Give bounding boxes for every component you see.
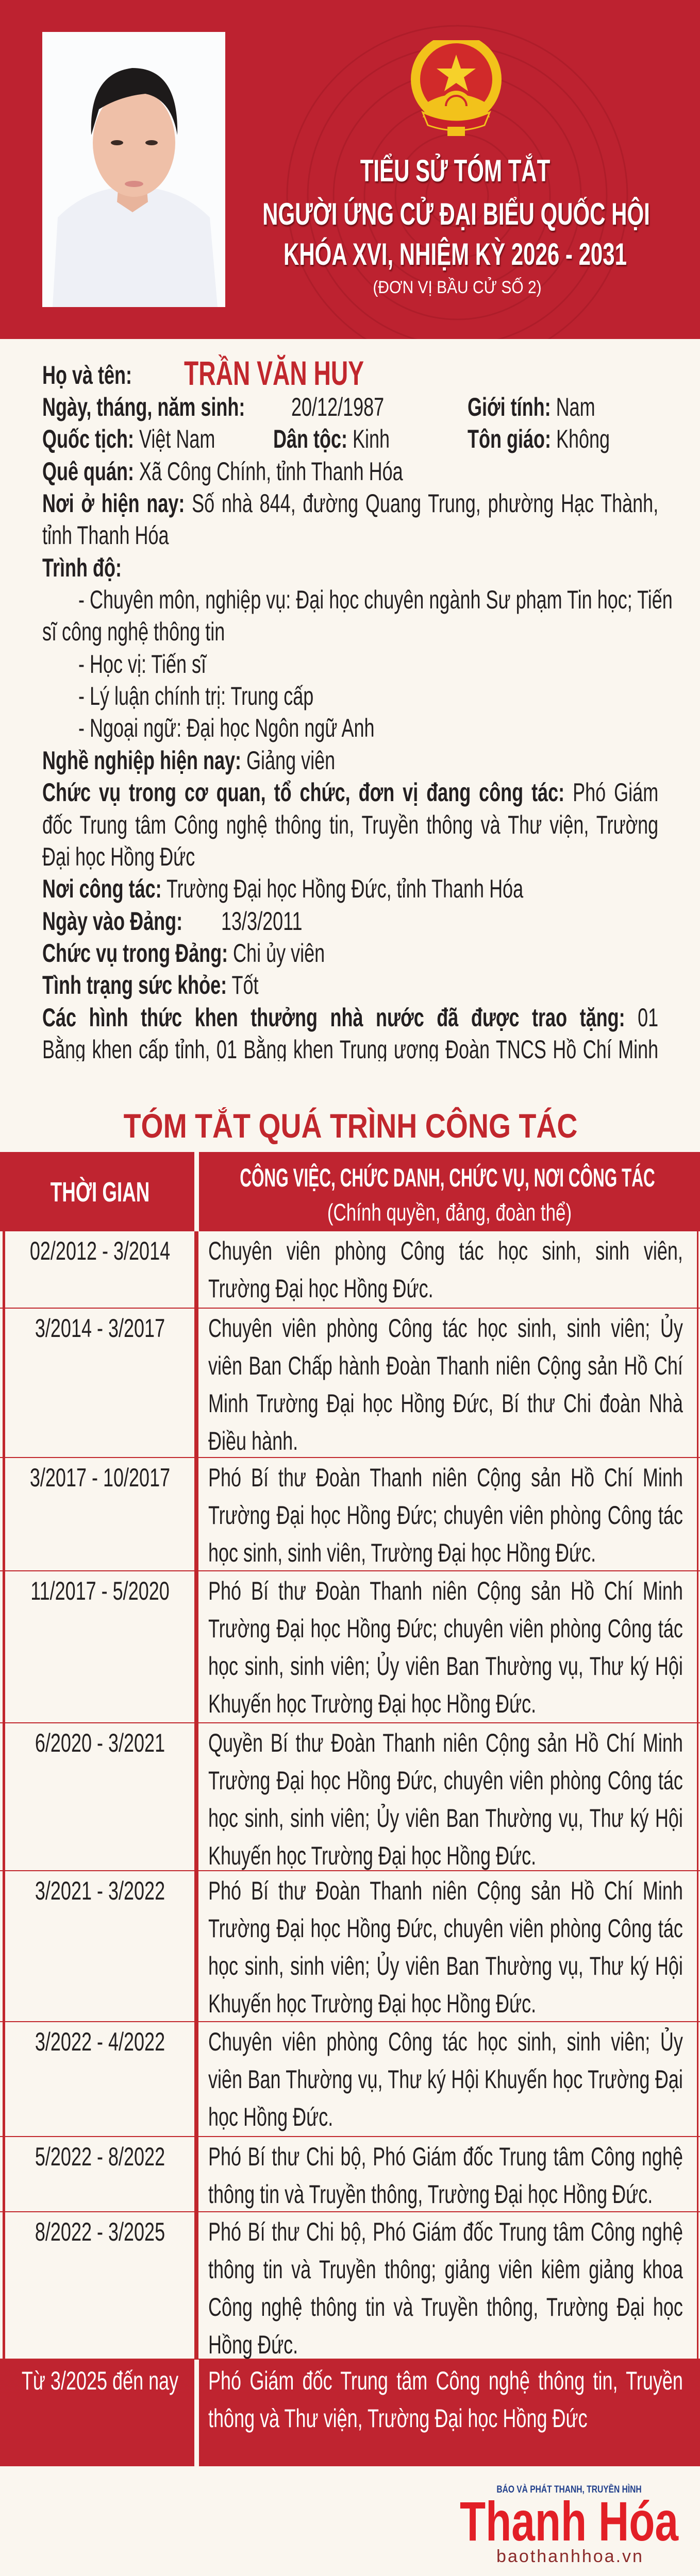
title: (ĐƠN VỊ BẦU CỬ SỐ 2) <box>373 278 542 297</box>
row 9: 8/2022 - 3/2025 <box>35 2217 165 2246</box>
row 6: học sinh, sinh viên; Ủy viên Ban Thường vụ, Thư ký Hội <box>208 1952 683 1980</box>
row 7 <box>0 2022 700 2137</box>
row 2: 3/2014 - 3/2017 <box>35 1314 165 1343</box>
table header: THỜI GIAN <box>51 1177 149 1208</box>
panel: personal information: đốc Trung tâm Công nghệ thông tin, Truyền thông và Thư viện, Trường <box>42 810 658 839</box>
logo: Thanh Hóa newspaper: Thanh Hóa <box>460 2490 678 2552</box>
row 3: học sinh, sinh viên, Trường Đại học Hồng Đức. <box>208 1538 596 1567</box>
table borders <box>3 1231 5 2360</box>
row 2: viên Ban Chấp hành Đoàn Thanh niên Cộng sản Hồ Chí <box>208 1351 683 1380</box>
row 2: Điều hành. <box>208 1427 298 1455</box>
row 5: học sinh, sinh viên; Ủy viên Ban Thường vụ, Thư ký Hội <box>208 1804 683 1833</box>
row 1 <box>0 1231 700 1309</box>
row 1: Trường Đại học Hồng Đức. <box>208 1274 434 1303</box>
row 3: 3/2017 - 10/2017 <box>30 1463 170 1492</box>
row 7: học Hồng Đức. <box>208 2103 333 2131</box>
candidate name: TRẦN VĂN HUY <box>184 354 364 392</box>
row 5 <box>0 1723 700 1871</box>
row 7: Chuyên viên phòng Công tác học sinh, sinh viên; Ủy <box>208 2027 683 2056</box>
logo: Thanh Hóa newspaper: BÁO VÀ PHÁT THANH, TRUYỀN HÌNH <box>496 2484 642 2495</box>
panel: personal information: sĩ công nghệ thông tin <box>42 617 225 646</box>
row 2: Minh Trường Đại học Hồng Đức, Bí thư Chi đoàn Nhà <box>208 1389 683 1418</box>
panel: personal information: Tình trạng sức khỏe: Tốt <box>42 971 258 999</box>
row 4: học sinh, sinh viên; Ủy viên Ban Thường vụ, Thư ký Hội <box>208 1652 683 1681</box>
panel: personal information: Quốc tịch: Việt Nam <box>42 425 215 453</box>
heading: work history: TÓM TẮT QUÁ TRÌNH CÔNG TÁC <box>124 1107 577 1145</box>
row 8 <box>0 2137 700 2212</box>
panel: personal information: Dân tộc: Kinh <box>273 425 390 453</box>
panel: personal information: Các hình thức khen thưởng nhà nước đã được trao tặng: 01 <box>42 1003 658 1032</box>
row 6: 3/2021 - 3/2022 <box>35 1876 165 1905</box>
panel: personal information <box>42 354 673 1061</box>
row 6: Trường Đại học Hồng Đức, chuyên viên phòng Công tác <box>208 1914 683 1943</box>
row 2 <box>0 1309 700 1458</box>
icon: national emblem <box>411 40 502 136</box>
panel: personal information: Tôn giáo: Không <box>468 425 610 453</box>
panel: personal information: Họ và tên: <box>42 361 132 389</box>
table header <box>0 1152 700 1231</box>
row 8: Phó Bí thư Chi bộ, Phó Giám đốc Trung tâm Công nghệ <box>208 2142 683 2171</box>
panel: personal information: Đại học Hồng Đức <box>42 842 195 871</box>
row 2: Chuyên viên phòng Công tác học sinh, sinh viên; Ủy <box>208 1314 683 1343</box>
title: NGƯỜI ỨNG CỬ ĐẠI BIỂU QUỐC HỘI <box>262 197 650 231</box>
logo: Thanh Hóa newspaper: baothanhhoa.vn <box>496 2547 644 2566</box>
decorative drum pattern <box>287 25 628 339</box>
row 5: 6/2020 - 3/2021 <box>35 1728 165 1757</box>
panel: personal information: - Lý luận chính trị: Trung cấp <box>78 682 313 710</box>
panel: personal information: Nơi ở hiện nay: Số nhà 844, đường Quang Trung, phường Hạc Thành, <box>42 489 658 518</box>
row 4: Phó Bí thư Đoàn Thanh niên Cộng sản Hồ Chí Minh <box>208 1577 683 1605</box>
row 1: 02/2012 - 3/2014 <box>30 1236 170 1265</box>
row 3: Trường Đại học Hồng Đức; chuyên viên phòng Công tác <box>208 1501 683 1530</box>
row 5: Quyền Bí thư Đoàn Thanh niên Cộng sản Hồ Chí Minh <box>208 1728 683 1757</box>
candidate photo <box>42 32 225 307</box>
row 9 <box>0 2212 700 2360</box>
panel: personal information: Nghề nghiệp hiện nay: Giảng viên <box>42 746 335 775</box>
title: TIỂU SỬ TÓM TẮT <box>360 154 550 188</box>
row 9: Phó Bí thư Chi bộ, Phó Giám đốc Trung tâm Công nghệ <box>208 2217 683 2246</box>
row 9: Hồng Đức. <box>208 2330 298 2359</box>
row 10: current (highlighted): thông và Thư viện, Trường Đại học Hồng Đức <box>208 2404 588 2433</box>
row 9: Công nghệ thông tin và Truyền thông, Trường Đại học <box>208 2293 683 2321</box>
row 4: Khuyến học Trường Đại học Hồng Đức. <box>208 1689 536 1718</box>
panel: personal information: 13/3/2011 <box>221 907 302 936</box>
row 7: 3/2022 - 4/2022 <box>35 2027 165 2056</box>
row 1: Chuyên viên phòng Công tác học sinh, sinh viên, <box>208 1236 683 1265</box>
panel: personal information: 20/12/1987 <box>291 393 384 421</box>
row 8: 5/2022 - 8/2022 <box>35 2142 165 2171</box>
row 8: thông tin và Truyền thông, Trường Đại học Hồng Đức. <box>208 2180 653 2209</box>
panel: personal information: Giới tính: Nam <box>468 393 595 421</box>
panel: personal information: Quê quán: Xã Công Chính, tỉnh Thanh Hóa <box>42 457 403 486</box>
row 7: viên Ban Thường vụ, Thư ký Hội Khuyến học Trường Đại <box>208 2065 683 2094</box>
panel: personal information: - Ngoại ngữ: Đại học Ngôn ngữ Anh <box>78 714 375 742</box>
panel: personal information: Ngày, tháng, năm sinh: <box>42 393 245 421</box>
panel: personal information: - Chuyên môn, nghiệp vụ: Đại học chuyên ngành Sư phạm Tin học; Tiến <box>78 585 673 614</box>
row 6: Khuyến học Trường Đại học Hồng Đức. <box>208 1989 536 2018</box>
panel: personal information: - Học vị: Tiến sĩ <box>78 650 206 679</box>
table header: CÔNG VIỆC, CHỨC DANH, CHỨC VỤ, NƠI CÔNG TÁC <box>240 1163 655 1192</box>
panel: personal information: Ngày vào Đảng: <box>42 907 182 936</box>
panel: personal information: Nơi công tác: Trường Đại học Hồng Đức, tỉnh Thanh Hóa <box>42 874 523 903</box>
table: work history <box>0 1152 700 2466</box>
row 4: 11/2017 - 5/2020 <box>30 1577 170 1605</box>
title <box>262 154 650 297</box>
row 3: Phó Bí thư Đoàn Thanh niên Cộng sản Hồ Chí Minh <box>208 1463 683 1492</box>
header banner <box>0 0 700 339</box>
row 10: current (highlighted) <box>0 2360 700 2466</box>
row 6: Phó Bí thư Đoàn Thanh niên Cộng sản Hồ Chí Minh <box>208 1876 683 1905</box>
row 10: current (highlighted): Từ 3/2025 đến nay <box>22 2366 178 2395</box>
row 10: current (highlighted): Phó Giám đốc Trung tâm Công nghệ thông tin, Truyền <box>208 2366 683 2395</box>
panel: personal information: Chức vụ trong cơ quan, tổ chức, đơn vị đang công tác: Phó Giám <box>42 778 658 807</box>
row 6 <box>0 1871 700 2022</box>
panel: personal information: Chức vụ trong Đảng: Chi ủy viên <box>42 939 325 968</box>
title: KHÓA XVI, NHIỆM KỲ 2026 - 2031 <box>284 237 627 272</box>
row 3 <box>0 1458 700 1571</box>
panel: personal information: Trình độ: <box>42 553 122 582</box>
row 5: Trường Đại học Hồng Đức, chuyên viên phòng Công tác <box>208 1766 683 1795</box>
row 5: Khuyến học Trường Đại học Hồng Đức. <box>208 1841 536 1870</box>
row 4: Trường Đại học Hồng Đức; chuyên viên phòng Công tác <box>208 1614 683 1643</box>
row 9: thông tin và Truyền thông; giảng viên kiêm giảng khoa <box>208 2255 683 2284</box>
table header: (Chính quyền, đảng, đoàn thể) <box>327 1199 572 1226</box>
panel: personal information: tỉnh Thanh Hóa <box>42 521 169 550</box>
row 4 <box>0 1571 700 1723</box>
